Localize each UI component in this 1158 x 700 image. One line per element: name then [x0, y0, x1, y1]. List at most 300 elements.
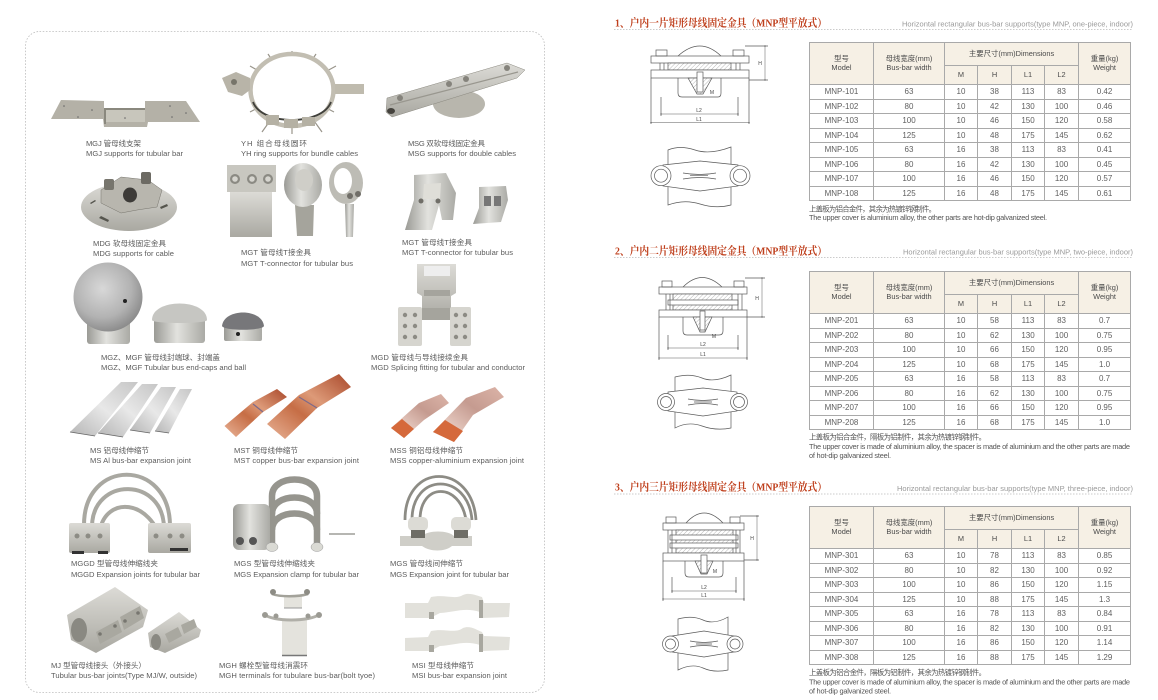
table: MNP-200 series: 120 — [1055, 403, 1068, 412]
table: MNP-200 series: MNP-206 — [825, 389, 858, 398]
table: MNP-100 series: 120 — [1055, 116, 1068, 125]
table: MNP-300 series: L1 — [1024, 534, 1032, 543]
photo: YH ring — [222, 51, 364, 134]
table: MNP-100 series: 120 — [1055, 174, 1068, 183]
table: MNP-300 series: 78 — [990, 551, 999, 560]
photo: MSG bar on base — [386, 63, 525, 118]
table: MNP-200 series: MNP-205 — [825, 374, 858, 383]
table: MNP-100 series: 0.57 — [1097, 174, 1112, 183]
table: MNP-200 series: 0.95 — [1097, 403, 1112, 412]
caption: MGZ MGF: MGZ、MGF 管母线封端球、封端盖 — [101, 352, 220, 362]
table: MNP-100 series: 42 — [990, 160, 999, 169]
table: MNP-200 series: 0.7 — [1099, 374, 1110, 383]
table: MNP-300 series: 16 — [957, 653, 965, 662]
table: MNP-100 series: 100 — [1055, 160, 1068, 169]
table: MNP-100 series: MNP-106 — [825, 160, 858, 169]
section heading: 1、户内一片矩形母线固定金具（MNP型平放式） — [615, 16, 827, 30]
table: MNP-100 series: Weight — [1093, 62, 1116, 72]
caption: MSI — [412, 660, 508, 680]
table: MNP-200 series: 0.7 — [1099, 316, 1110, 325]
table: MNP-100 series: 0.61 — [1097, 189, 1112, 198]
table: MNP-200 series: 68 — [990, 360, 999, 369]
table: MNP-200 series: 125 — [902, 418, 916, 427]
table: MNP-200 series: H — [992, 299, 997, 308]
table: MNP-100 series: MNP-107 — [825, 174, 858, 183]
table: MNP-300 series: 63 — [905, 609, 913, 618]
table: MNP-100 series: 83 — [1057, 145, 1066, 154]
table: MNP-200 series: MNP-207 — [825, 403, 858, 412]
table: MNP-100 series: 48 — [990, 189, 999, 198]
table: MNP-100 series: 38 — [990, 145, 999, 154]
photo: MGGD clamps with braids — [69, 475, 191, 554]
table: MNP-200 series: 63 — [905, 316, 913, 325]
table: MNP-300 series: 80 — [905, 624, 913, 633]
caption: MGJ: MGJ 管母线支架 — [86, 138, 141, 148]
photo: two bi-metal strips — [391, 387, 504, 442]
table: MNP-300 series: 175 — [1021, 595, 1035, 604]
table: MNP-300 series: MNP-306 — [825, 624, 858, 633]
table: MNP-100 series: 83 — [1057, 87, 1066, 96]
table: MNP-200 series: 10 — [957, 331, 965, 340]
table: MNP-200 series: 80 — [905, 389, 913, 398]
table: MNP-300 series: Weight — [1093, 526, 1116, 536]
product: MGT T-connector, three views — [227, 162, 363, 268]
table: MNP-100 series: 145 — [1055, 131, 1068, 140]
table: MNP-100 series: 46 — [990, 174, 999, 183]
table: MNP-300 series: 88 — [990, 653, 999, 662]
table: MNP-300 series: 130 — [1021, 624, 1035, 633]
table: MNP-300 series: 63 — [905, 551, 913, 560]
table: MNP-300 series: 重量(kg) — [1091, 518, 1118, 527]
table: MNP-300 series: 125 — [902, 653, 916, 662]
table: MNP-300 series: 150 — [1021, 580, 1035, 589]
diagram: side section view: M — [710, 90, 714, 96]
table: MNP-100 series: 130 — [1021, 102, 1035, 111]
table: MNP-100 series: 10 — [957, 102, 965, 111]
table: MNP-200 series: 130 — [1021, 389, 1035, 398]
note text: The upper cover is aluminium alloy, the other parts are hot-dip galvanized steel. — [809, 213, 1047, 222]
table: MNP-300 series: 0.91 — [1097, 624, 1112, 633]
photo: MGT connectors — [227, 162, 363, 237]
panel frame: dashed rounded border — [26, 32, 544, 692]
diagram: side section view: L1 — [700, 352, 706, 358]
table: MNP-200 series: MNP-208 — [825, 418, 858, 427]
caption: MSI: MSI bus-bar expansion joint — [412, 671, 508, 680]
section 2: MNP two-piece — [614, 244, 1133, 460]
table: MNP-300 series: 150 — [1021, 638, 1035, 647]
product: MST copper expansion joint — [224, 374, 360, 465]
table: MNP-200 series: 100 — [1055, 389, 1068, 398]
table: MNP-100 series: 100 — [902, 116, 916, 125]
table: MNP-100 series: 125 — [902, 131, 916, 140]
table: MNP-100 series: Bus-bar width — [886, 62, 932, 72]
table: MNP-200 series: 16 — [957, 418, 965, 427]
table: MNP-300 series: 113 — [1022, 551, 1034, 560]
caption: MGT right: MGT T-connector for tubular bus — [402, 248, 513, 257]
table: MNP-100 series: 0.41 — [1097, 145, 1112, 154]
caption: MGT right — [402, 237, 513, 257]
caption: MST: MST 铜母线伸缩节 — [234, 445, 298, 455]
table: MNP-200 series: 100 — [902, 403, 916, 412]
table: MNP-300 series: 83 — [1057, 609, 1066, 618]
table: MNP-300 series: 100 — [1055, 566, 1068, 575]
product: YH ring — [222, 51, 364, 158]
caption: MJ: MJ 型管母线接头（外接头） — [51, 660, 146, 670]
table: MNP-300 series: 10 — [957, 595, 965, 604]
table: MNP-200 series: 16 — [957, 403, 965, 412]
photo: two MSI bars — [405, 594, 510, 652]
caption: MGH: MGH terminals for tubulare bus-bar(bolt tyoe) — [219, 671, 375, 680]
diagram: side section view: L2 — [701, 585, 707, 591]
section heading: 3、户内三片矩形母线固定金具（MNP型平放式） — [615, 480, 827, 494]
caption: MSI: MSI 型母线伸缩节 — [412, 660, 474, 670]
table: MNP-200 series: 66 — [990, 403, 999, 412]
table: MNP-200 series: 主要尺寸(mm)Dimensions — [969, 278, 1054, 287]
table: MNP-300 series: 86 — [990, 638, 999, 647]
note text — [809, 432, 1130, 460]
photo: MGS clamp with braided loops — [233, 480, 355, 552]
caption: MGS joint: MGS 管母线间伸缩节 — [390, 558, 463, 568]
product: MDG cable support — [81, 172, 177, 258]
caption: MGGD: MGGD Expansion joints for tubular bar — [71, 570, 200, 579]
table: MNP-200 series: 83 — [1057, 316, 1066, 325]
table: MNP-300 series: H — [992, 534, 997, 543]
table: MNP-200 series: 130 — [1021, 331, 1035, 340]
table: MNP-300 series: 0.85 — [1097, 551, 1112, 560]
photo: MGS arched joint — [400, 476, 476, 550]
caption: MDG: MDG 软母线固定金具 — [93, 238, 166, 248]
note text: 上盖板为铝合金件，其余为热镀锌钢制件。 — [809, 204, 936, 214]
table: MNP-200 series — [809, 271, 1131, 430]
table: MNP-200 series: 62 — [990, 389, 999, 398]
table: MNP-300 series: MNP-303 — [825, 580, 858, 589]
table: MNP-300 series: 125 — [902, 595, 916, 604]
caption: MGS clamp — [234, 558, 359, 579]
table: MNP-200 series: Model — [831, 292, 852, 300]
table: MNP-200 series: 10 — [957, 360, 965, 369]
table: MNP-100 series: MNP-108 — [825, 189, 858, 198]
product: MGJ supports — [51, 100, 200, 158]
diagram: side section view: M — [713, 569, 717, 575]
caption: MGZ MGF — [101, 352, 246, 372]
table: MNP-100 series: 10 — [957, 131, 965, 140]
diagram: side section view — [659, 278, 765, 360]
table: MNP-200 series: 120 — [1055, 345, 1068, 354]
table: MNP-100 series: 125 — [902, 189, 916, 198]
table: MNP-200 series: L2 — [1057, 299, 1066, 308]
caption: MDG — [93, 238, 174, 258]
table: MNP-300 series: 10 — [957, 580, 965, 589]
product: MSS copper-aluminium expansion joint — [390, 387, 525, 465]
caption: MST: MST copper bus-bar expansion joint — [234, 456, 360, 465]
table: MNP-200 series: MNP-201 — [825, 316, 858, 325]
table: MNP-200 series: 0.75 — [1097, 331, 1112, 340]
table: MNP-100 series: 175 — [1021, 189, 1035, 198]
diagram: top plan view — [662, 617, 743, 671]
table: MNP-100 series: 63 — [905, 87, 913, 96]
table: MNP-100 series: 38 — [990, 87, 999, 96]
table: MNP-300 series: 88 — [990, 595, 999, 604]
diagram: side section view: H — [755, 296, 759, 302]
table: MNP-200 series: MNP-203 — [825, 345, 858, 354]
table: MNP-100 series: 16 — [957, 189, 965, 198]
table: MNP-300 series: 80 — [905, 566, 913, 575]
table: MNP-200 series: 58 — [990, 316, 999, 325]
product: MGD splicing fitting — [371, 264, 525, 372]
caption: MSG: MSG supports for double cables — [408, 149, 516, 158]
table: MNP-200 series: 1.0 — [1099, 360, 1110, 369]
section 3: MNP three-piece — [614, 480, 1133, 696]
diagram: side section view: L2 — [696, 108, 702, 114]
caption: MGT middle: MGT T-connector for tubular bus — [241, 259, 353, 268]
table: MNP-300 series: MNP-307 — [825, 638, 858, 647]
table: MNP-100 series: 80 — [905, 160, 913, 169]
diagram: top plan view — [658, 375, 748, 429]
caption: MGJ — [86, 138, 183, 158]
table: MNP-200 series: 175 — [1021, 360, 1035, 369]
table: MNP-100 series: 16 — [957, 145, 965, 154]
note text: of hot-dip galvanized steel. — [809, 451, 891, 460]
diagram: side section view: H — [750, 536, 754, 542]
caption: MGZ MGF: MGZ、MGF Tubular bus end-caps and ball — [101, 363, 246, 372]
table: MNP-100 series: 130 — [1021, 160, 1035, 169]
table: MNP-200 series: Weight — [1093, 292, 1116, 300]
product: MJ tubular joints — [51, 587, 201, 680]
caption: MGGD — [71, 558, 200, 579]
caption: MGT middle — [241, 247, 353, 268]
section subheading: Horizontal rectangular bus-bar supports(type MNP, two-piece, indoor) — [903, 248, 1133, 256]
caption: MGH: MGH 螺栓型管母线消震环 — [219, 660, 308, 670]
table: MNP-300 series: MNP-302 — [825, 566, 858, 575]
table: MNP-300 series: 1.15 — [1097, 580, 1112, 589]
table: MNP-300 series: 1.29 — [1097, 653, 1112, 662]
table: MNP-100 series: L2 — [1057, 70, 1066, 79]
table: MNP-100 series: 型号 — [834, 54, 849, 63]
product: MGT T-connector right — [402, 173, 513, 257]
diagram: side section view: L2 — [700, 342, 706, 348]
table: MNP-300 series: M — [958, 534, 964, 543]
table: MNP-100 series: 150 — [1021, 116, 1035, 125]
section subheading: Horizontal rectangular bus-bar supports(type MNP, one-piece, indoor) — [902, 20, 1134, 28]
diagram: side section view — [663, 513, 759, 601]
table: MNP-200 series: 68 — [990, 418, 999, 427]
table: MNP-200 series: 10 — [957, 316, 965, 325]
table: MNP-200 series: 58 — [990, 374, 999, 383]
table: MNP-200 series: 100 — [902, 345, 916, 354]
table: MNP-100 series: 42 — [990, 102, 999, 111]
table: MNP-100 series: 重量(kg) — [1091, 54, 1118, 63]
caption: MGT middle: MGT 管母线T接金具 — [241, 247, 311, 257]
table: MNP-300 series: 113 — [1022, 609, 1034, 618]
caption: MST — [234, 445, 360, 465]
note text: The upper cover is made of aluminium alloy, the spacer is made of aluminium and the other parts are made — [809, 442, 1130, 451]
table: MNP-100 series: 10 — [957, 87, 965, 96]
note text: 上盖板为铝合金件，隔板为铝制件，其余为热镀锌钢制件。 — [809, 668, 986, 677]
table: MNP-200 series: 145 — [1055, 360, 1068, 369]
caption: YH: YH 组合母线圆环 — [241, 138, 307, 148]
diagram: side section view — [651, 46, 768, 124]
caption: MS: MS Al bus-bar expansion joint — [90, 456, 192, 465]
table: MNP-200 series: 母线宽度(mm) — [886, 283, 932, 292]
table: MNP-200 series: 175 — [1021, 418, 1035, 427]
table: MNP-100 series: 16 — [957, 160, 965, 169]
table: MNP-300 series: Model — [831, 526, 852, 536]
product: MS Al expansion joint — [70, 382, 192, 465]
caption: MGJ: MGJ supports for tubular bar — [86, 149, 183, 158]
table: MNP-100 series: 母线宽度(mm) — [886, 54, 932, 63]
table: MNP-200 series: MNP-202 — [825, 331, 858, 340]
table: MNP-300 series: 0.92 — [1097, 566, 1112, 575]
caption: MJ — [51, 660, 197, 680]
photo: MGH terminal pieces — [262, 589, 322, 656]
caption: MS: MS 铝母线伸缩节 — [90, 445, 149, 455]
table: MNP-200 series: 83 — [1057, 374, 1066, 383]
product: MGGD expansion joints — [69, 475, 200, 579]
table: MNP-100 series: 175 — [1021, 131, 1035, 140]
table: MNP-200 series: 150 — [1021, 403, 1035, 412]
table: MNP-300 series: 100 — [902, 580, 916, 589]
table: MNP-300 series: 120 — [1055, 638, 1068, 647]
table: MNP-100 series: 主要尺寸(mm)Dimensions — [969, 49, 1054, 58]
table: MNP-100 series: 48 — [990, 131, 999, 140]
table: MNP-100 series: 63 — [905, 145, 913, 154]
table: MNP-200 series: 113 — [1022, 316, 1034, 325]
table: MNP-300 series: 1.14 — [1097, 638, 1112, 647]
diagram: side section view: L1 — [696, 117, 702, 123]
table: MNP-300 series: 16 — [957, 638, 965, 647]
table: MNP-100 series: 100 — [902, 174, 916, 183]
table: MNP-300 series: 145 — [1055, 595, 1068, 604]
caption: MGD: MGD Splicing fitting for tubular and conductor — [371, 363, 525, 372]
note text — [809, 204, 1047, 222]
note text: of hot-dip galvanized steel. — [809, 686, 891, 696]
table: MNP-100 series: MNP-104 — [825, 131, 858, 140]
table: MNP-100 series: 113 — [1022, 145, 1034, 154]
caption: MGD — [371, 352, 525, 372]
table: MNP-300 series: 16 — [957, 624, 965, 633]
caption: MSG: MSG 双软母线固定金具 — [408, 138, 485, 148]
table: MNP-200 series: 145 — [1055, 418, 1068, 427]
caption: MGH — [219, 660, 375, 680]
table: MNP-100 series: MNP-103 — [825, 116, 858, 125]
section 1: MNP one-piece — [614, 16, 1134, 222]
table: MNP-300 series: Bus-bar width — [886, 526, 932, 536]
table: MNP-200 series: 16 — [957, 389, 965, 398]
photo: MGT connectors right — [405, 173, 508, 230]
table: MNP-300 series: 10 — [957, 566, 965, 575]
caption: MSS — [390, 445, 525, 465]
table: MNP-300 series: 型号 — [834, 518, 849, 527]
table: MNP-300 series: 175 — [1021, 653, 1035, 662]
table: MNP-300 series: 86 — [990, 580, 999, 589]
product: MSG double cable support — [386, 63, 525, 158]
caption: MGS joint: MGS Expansion joint for tubular bar — [390, 570, 509, 579]
caption: MGS clamp: MGS 型管母线伸缩线夹 — [234, 558, 315, 568]
table: MNP-200 series: 1.0 — [1099, 418, 1110, 427]
caption: MSS: MSS copper-aluminium expansion joint — [390, 456, 525, 465]
caption: MS — [90, 445, 192, 465]
table: MNP-200 series: 重量(kg) — [1091, 283, 1118, 292]
section subheading: Horizontal rectangular bus-bar supports(type MNP, three-piece, indoor) — [897, 484, 1133, 493]
table: MNP-300 series: 145 — [1055, 653, 1068, 662]
caption: MSG — [408, 138, 516, 158]
table: MNP-300 series — [809, 506, 1131, 665]
table: MNP-300 series: 0.84 — [1097, 609, 1112, 618]
product: MGS expansion joint — [390, 476, 509, 579]
table: MNP-300 series: 1.3 — [1099, 595, 1110, 604]
caption: YH: YH ring supports for bundle cables — [241, 149, 358, 158]
diagram: side section view: L1 — [701, 593, 707, 599]
table: MNP-100 series: H — [992, 70, 997, 79]
table: MNP-100 series: M — [958, 70, 964, 79]
table: MNP-300 series: 100 — [1055, 624, 1068, 633]
table: MNP-300 series: 母线宽度(mm) — [886, 518, 932, 527]
caption: MGGD: MGGD 型管母线伸缩线夹 — [71, 558, 158, 568]
table: MNP-100 series: L1 — [1024, 70, 1032, 79]
product: MGZ MGF end caps and ball — [74, 262, 264, 372]
table: MNP-100 series: MNP-101 — [825, 87, 858, 96]
photo: MGD fitting — [398, 264, 471, 346]
diagram: top plan view — [651, 147, 750, 207]
table: MNP-200 series: 125 — [902, 360, 916, 369]
product: MGS expansion clamp — [233, 480, 359, 579]
table: MNP-300 series: 82 — [990, 566, 999, 575]
panel: product photo catalogue — [25, 31, 545, 693]
photo: MGJ bracket plate — [51, 100, 200, 127]
diagram: side section view: M — [712, 334, 716, 340]
table: MNP-100 series: 0.45 — [1097, 160, 1112, 169]
table: MNP-200 series: 16 — [957, 374, 965, 383]
table: MNP-200 series: 62 — [990, 331, 999, 340]
table: MNP-300 series: 130 — [1021, 566, 1035, 575]
photo: four aluminium strips — [70, 382, 192, 437]
diagram: side section view: H — [758, 61, 762, 67]
table: MNP-100 series: Model — [831, 62, 852, 72]
table: MNP-200 series: 63 — [905, 374, 913, 383]
caption: MGS clamp: MGS Expansion clamp for tubular bar — [234, 570, 359, 579]
table: MNP-200 series: 80 — [905, 331, 913, 340]
table: MNP-300 series: 82 — [990, 624, 999, 633]
table: MNP-200 series: MNP-204 — [825, 360, 858, 369]
table: MNP-100 series: 0.42 — [1097, 87, 1112, 96]
caption: MJ: Tubular bus-bar joints(Type MJ/W, outside) — [51, 671, 197, 680]
note text: The upper cover is made of aluminium alloy, the spacer is made of aluminium and the other parts are made — [809, 678, 1130, 686]
table: MNP-300 series: MNP-304 — [825, 595, 858, 604]
table: MNP-200 series: 66 — [990, 345, 999, 354]
product: MGH terminals — [219, 589, 375, 680]
table: MNP-300 series: 83 — [1057, 551, 1066, 560]
table: MNP-100 series: 16 — [957, 174, 965, 183]
table: MNP-100 series: 100 — [1055, 102, 1068, 111]
photo: ball and two end caps — [74, 262, 264, 344]
table: MNP-300 series: 16 — [957, 609, 965, 618]
caption: MSS: MSS 铜铝母线伸缩节 — [390, 445, 463, 455]
table: MNP-300 series: 120 — [1055, 580, 1068, 589]
table: MNP-200 series: 113 — [1022, 374, 1034, 383]
table: MNP-100 series — [809, 42, 1131, 201]
table: MNP-200 series: 150 — [1021, 345, 1035, 354]
table: MNP-100 series: 0.46 — [1097, 102, 1112, 111]
table: MNP-100 series: 46 — [990, 116, 999, 125]
table: MNP-200 series: Bus-bar width — [886, 292, 932, 300]
caption: YH — [241, 138, 358, 158]
table: MNP-100 series: 0.58 — [1097, 116, 1112, 125]
table: MNP-300 series: 78 — [990, 609, 999, 618]
caption: MDG: MDG supports for cable — [93, 249, 174, 258]
table: MNP-300 series: 主要尺寸(mm)Dimensions — [969, 513, 1054, 522]
table: MNP-300 series: L2 — [1057, 534, 1066, 543]
table: MNP-100 series: 0.62 — [1097, 131, 1112, 140]
